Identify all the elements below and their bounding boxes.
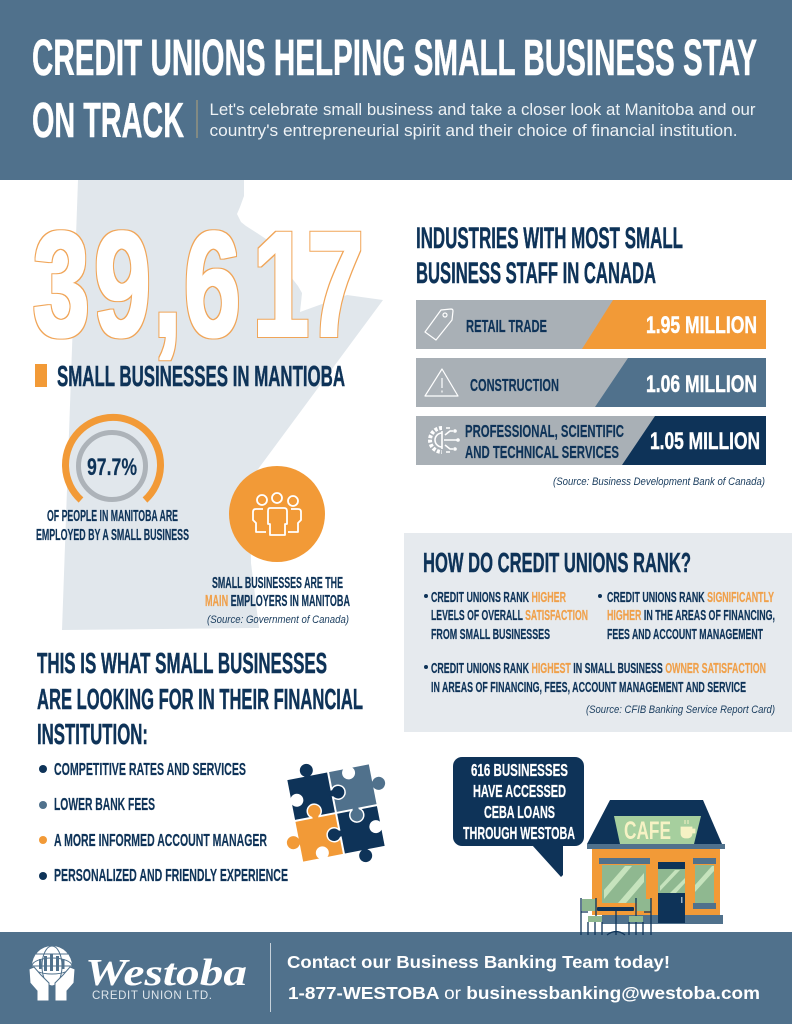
stat ring: 97.7%: 97.7%: [87, 454, 137, 481]
left window: [599, 858, 650, 903]
rank bullet 1: [424, 590, 588, 643]
icon: people in orange circle: [229, 466, 325, 562]
small businesses heading: SMALL BUSINESSES IN MANTIOBA: [57, 361, 345, 393]
rank bullet 1: LEVELS OF OVERALL SATISFACTION: [431, 608, 630, 624]
header intro text: Let's celebrate small business and take a closer look at Manitoba and our: [210, 101, 756, 119]
logo: Westoba credit union: [29, 946, 247, 1002]
illustration: cafe storefront: [581, 800, 725, 935]
patio table and chairs: [581, 898, 651, 935]
panel: retail trade bar: RETAIL TRADE: [466, 316, 547, 336]
rank bullet 1: FROM SMALL BUSINESSES: [431, 627, 550, 643]
panel: professional services bar: AND TECHNICAL SERVICES: [465, 442, 619, 462]
callout: CEBA loans speech bubble: CEBA LOANS: [484, 802, 555, 822]
title line 2: ON TRACK: [32, 94, 184, 148]
icon: puzzle pieces: [273, 750, 399, 876]
source: BDC: (Source: Business Development Bank of Canada): [553, 476, 765, 488]
heading: what small businesses look for: INSTITUTION:: [37, 719, 148, 751]
map of Manitoba: [62, 180, 383, 630]
cafe sign: CAFE: [624, 817, 671, 845]
door: [658, 862, 685, 923]
ring caption: EMPLOYED BY A SMALL BUSINESS: [36, 527, 189, 544]
list: financial institution needs: COMPETITIVE RATES AND SERVICES: [54, 759, 246, 779]
contact details: 1-877-WESTOBA or businessbanking@westoba.com: [288, 983, 760, 1003]
footer bar: [0, 932, 792, 1024]
panel: header banner: [0, 0, 792, 180]
rank bullet 3: [424, 661, 766, 696]
employers caption: MAIN EMPLOYERS IN MANITOBA: [205, 593, 437, 610]
callout: CEBA loans speech bubble: [453, 757, 584, 877]
heading: what small businesses look for: ARE LOOKING FOR IN THEIR FINANCIAL: [37, 684, 363, 716]
callout: CEBA loans speech bubble: THROUGH WESTOBA: [463, 823, 575, 843]
list: financial institution needs: LOWER BANK FEES: [54, 794, 155, 814]
logo wordmark: Westoba: [85, 952, 247, 994]
icon: price tag: [425, 309, 453, 340]
source: government of Canada: (Source: Government of Canada): [207, 614, 349, 626]
small businesses heading: [35, 361, 345, 393]
rank bullet 1: CREDIT UNIONS RANK HIGHER: [431, 590, 591, 606]
header intro text: country's entrepreneurial spirit and their choice of financial institution.: [210, 122, 738, 140]
panel: professional services bar: [416, 416, 766, 465]
icon: globe and hands: [29, 946, 75, 1001]
big number: 39,617: 39,617: [33, 202, 364, 369]
panel: how do credit unions rank: [404, 533, 792, 732]
list: financial institution needs: PERSONALIZED AND FRIENDLY EXPERIENCE: [54, 865, 288, 885]
panel: construction bar: [416, 358, 766, 407]
list: financial institution needs: A MORE INFORMED ACCOUNT MANAGER: [54, 830, 267, 850]
employers caption: SMALL BUSINESSES ARE THE: [212, 575, 343, 592]
ring caption: OF PEOPLE IN MANITOBA ARE: [47, 508, 178, 525]
panel: professional services bar: PROFESSIONAL, SCIENTIFIC: [465, 421, 624, 441]
rank bullet 2: [598, 590, 775, 643]
panel: retail trade bar: [416, 300, 766, 349]
callout: CEBA loans speech bubble: HAVE ACCESSED: [473, 781, 566, 801]
icon: tech gear: [430, 428, 459, 452]
heading: what small businesses look for: THIS IS WHAT SMALL BUSINESSES: [37, 648, 327, 680]
logo subtitle: CREDIT UNION LTD.: [92, 990, 212, 1002]
contact heading: Contact our Business Banking Team today!: [287, 952, 670, 972]
callout: CEBA loans speech bubble: 616 BUSINESSES: [471, 760, 568, 780]
list: financial institution needs: [39, 759, 288, 885]
panel: construction bar: CONSTRUCTION: [470, 375, 559, 395]
right window: [693, 858, 716, 909]
roof: [587, 800, 722, 844]
icon: warning triangle: [425, 369, 458, 396]
stat ring: 97.7%: [66, 417, 161, 500]
